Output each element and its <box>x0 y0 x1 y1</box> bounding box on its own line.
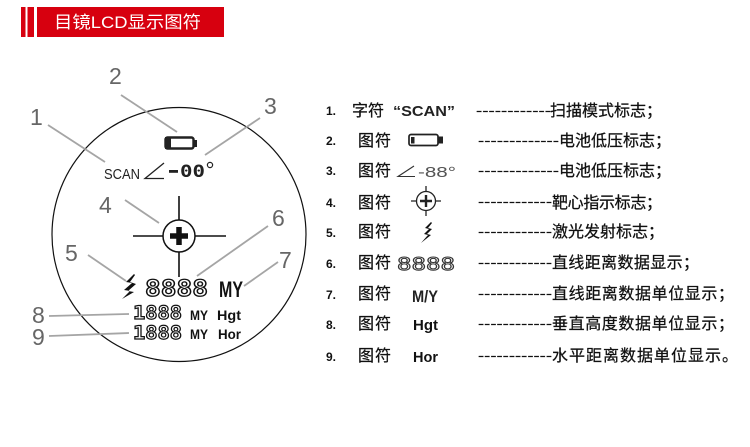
callout 3: angle <box>205 93 277 155</box>
legend row 1: 扫描模式标志； <box>550 102 662 120</box>
legend row 9: Hor <box>413 349 438 366</box>
icon: angle <box>145 163 164 178</box>
legend row 4: 靶心指示标志； <box>552 194 662 212</box>
callout 7: distance unit: 7 <box>279 247 292 273</box>
legend row 7 <box>326 285 734 306</box>
legend row 8: ------------ <box>478 316 552 331</box>
legend row 6: 8888 <box>397 254 455 275</box>
legend row 6: 图符 <box>358 254 391 272</box>
legend row 5 <box>326 222 664 243</box>
legend row 7: M/Y <box>412 287 439 306</box>
height readout <box>133 302 241 324</box>
legend row 7: 7. <box>326 288 336 302</box>
callout 1: scan: 1 <box>30 104 43 130</box>
height readout: MY <box>190 307 209 323</box>
legend row 1 <box>326 102 662 120</box>
legend row 3: 电池低压标志； <box>559 162 671 180</box>
legend row 3: 图符 <box>358 162 391 180</box>
legend row 6: 6. <box>326 257 336 271</box>
callout 7: distance unit <box>244 247 292 286</box>
icon: angle reading small <box>398 164 456 181</box>
callout 8: height: 8 <box>32 302 45 328</box>
legend row 5: 激光发射标志； <box>552 223 664 241</box>
legend row 2: 图符 <box>358 132 391 150</box>
legend row 1: 1. <box>326 104 336 118</box>
legend row 8: 图符 <box>358 315 391 333</box>
icon: angle reading small: -88° <box>418 164 456 181</box>
legend row 7: 图符 <box>358 285 391 303</box>
legend row 1: ------------ <box>476 103 551 118</box>
legend row 8: Hgt <box>413 317 438 334</box>
horizontal readout: 1888 <box>133 322 182 344</box>
horizontal readout: MY <box>190 326 209 342</box>
legend row 6 <box>326 254 699 275</box>
legend row 4: 图符 <box>358 194 391 212</box>
legend row 9: 9. <box>326 350 336 364</box>
legend row 3: ------------- <box>478 163 559 178</box>
distance digits: 8888 <box>145 277 208 302</box>
title banner <box>21 7 224 37</box>
legend row 7: 直线距离数据单位显示； <box>552 285 734 303</box>
legend row 6: 直线距离数据显示； <box>552 254 699 272</box>
legend row 1: 字符 <box>352 102 384 120</box>
icon: laser bolt <box>122 274 136 299</box>
legend row 2: ------------- <box>478 133 559 148</box>
distance unit: MY <box>219 277 243 302</box>
title banner: 目镜LCD显示图符 <box>54 13 201 32</box>
callout 4: target: 4 <box>99 192 112 218</box>
legend row 2 <box>326 132 671 150</box>
panel: eyepiece LCD diagram <box>30 63 306 362</box>
legend row 3 <box>326 162 671 181</box>
horizontal readout <box>133 322 242 344</box>
legend row 8: 8. <box>326 318 336 332</box>
legend row 9 <box>326 347 738 366</box>
SCAN label: SCAN <box>104 166 140 183</box>
height readout: 1888 <box>133 302 182 324</box>
legend row 4: ------------ <box>478 194 552 209</box>
legend row 8: 垂直高度数据单位显示； <box>552 315 734 333</box>
icon: laser small <box>421 222 432 243</box>
callout 8: height <box>32 302 129 328</box>
callout 6: distance digits: 6 <box>272 205 285 231</box>
callout 3: angle: 3 <box>264 93 277 119</box>
legend row 5: 图符 <box>358 223 391 241</box>
callout 2: battery <box>109 63 177 132</box>
callout 6: distance digits <box>197 205 285 276</box>
horizontal readout: Hor <box>218 326 242 342</box>
legend row 4: 4. <box>326 196 336 210</box>
legend row 5: ------------ <box>478 224 552 239</box>
legend row 8 <box>326 315 734 334</box>
legend row 9: 水平距离数据单位显示。 <box>552 347 738 365</box>
callout 1: scan <box>30 104 105 162</box>
height readout: Hgt <box>217 307 241 323</box>
icon: target small <box>411 186 441 216</box>
callout 9: horizontal: 9 <box>32 324 45 350</box>
legend row 3: 3. <box>326 164 336 178</box>
angle reading: 00 <box>180 162 205 182</box>
eyepiece circle <box>52 108 306 362</box>
angle reading <box>169 162 213 182</box>
icon: battery <box>165 137 197 149</box>
legend row 6: ------------ <box>478 255 552 270</box>
panel: legend list <box>326 102 738 366</box>
legend row 1: “SCAN” <box>393 103 455 120</box>
legend row 7: ------------ <box>478 286 552 301</box>
icon: battery small <box>409 134 443 146</box>
legend row 2: 电池低压标志； <box>559 132 671 150</box>
legend row 9: 图符 <box>358 347 391 365</box>
legend row 2: 2. <box>326 134 336 148</box>
callout 5: laser: 5 <box>65 240 78 266</box>
icon: crosshair <box>133 196 226 277</box>
callout 4: target <box>99 192 159 223</box>
callout 9: horizontal <box>32 324 129 350</box>
callout 2: battery: 2 <box>109 63 122 89</box>
legend row 5: 5. <box>326 226 336 240</box>
legend row 9: ------------ <box>478 348 552 363</box>
callout 5: laser <box>65 240 126 281</box>
legend row 4 <box>326 186 662 216</box>
